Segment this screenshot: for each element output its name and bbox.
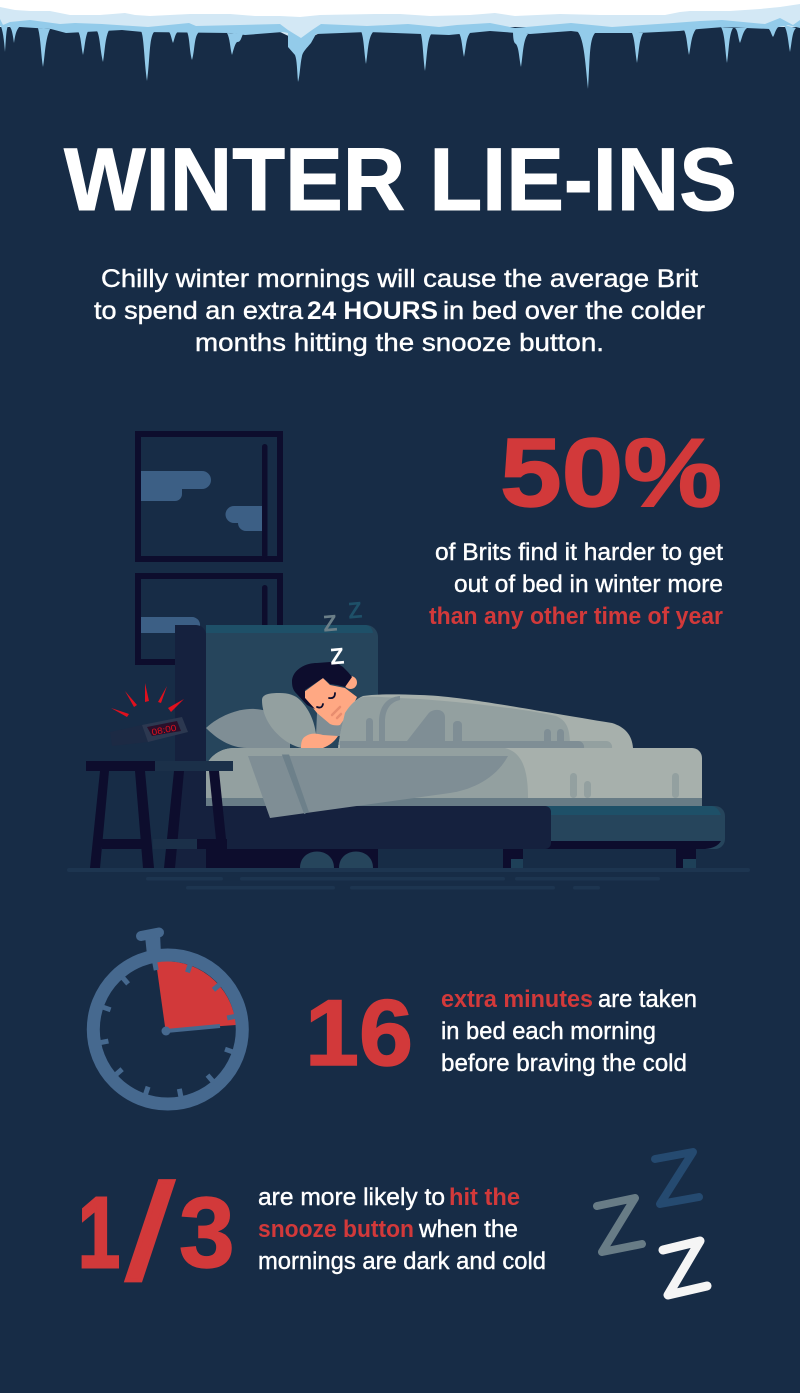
bed legs (503, 849, 696, 868)
snore Z letters (322, 596, 363, 670)
icicle drips (0, 24, 796, 89)
sleeping person (292, 662, 357, 748)
icon: window lower (138, 576, 280, 662)
stat: one third: snooze button (258, 1216, 414, 1243)
stat: 50 percent (429, 418, 723, 630)
stat: one third: mornings are dark and cold (258, 1248, 546, 1275)
icon: sleeping Z letters (597, 1152, 707, 1295)
icon: alarm clock (110, 683, 188, 746)
bed base (206, 806, 725, 849)
snore Z letters: Z (322, 609, 338, 637)
mattress and duvet (206, 748, 702, 806)
stat: 16 minutes: 16 (305, 980, 413, 1085)
intro text: 24 HOURS (307, 297, 438, 325)
intro text: Chilly winter mornings will cause the average Brit (101, 265, 698, 293)
stat: 16 minutes: in bed each morning (441, 1018, 656, 1045)
stat: one third: 3 (179, 1177, 235, 1289)
snore Z letters: Z (347, 596, 363, 624)
stat: 16 minutes: are taken (598, 986, 697, 1013)
stat: 50 percent: out of bed in winter more (454, 571, 723, 598)
stat: one third: 1 (78, 1177, 120, 1289)
title: WINTER LIE-INS (64, 129, 737, 229)
floor lines (67, 868, 750, 890)
stat: 50 percent: than any other time of year (429, 603, 723, 630)
snore Z letters: Z (329, 642, 345, 670)
top blanket over body (338, 694, 633, 748)
stat: one third: are more likely to (258, 1184, 445, 1211)
stat: 16 minutes: extra minutes (441, 986, 593, 1013)
stat: 16 minutes (305, 980, 697, 1085)
intro text: to spend an extra (94, 297, 303, 325)
stat: one third: hit the (449, 1184, 520, 1211)
stat: one third: when the (418, 1216, 518, 1243)
intro text (94, 265, 705, 357)
intro text: in bed over the colder (443, 297, 705, 325)
stat: 50 percent: of Brits find it harder to get (435, 539, 723, 566)
pillows (206, 693, 317, 748)
icon: stopwatch (93, 932, 242, 1104)
stat: one third (78, 1157, 546, 1308)
duvet fold (248, 756, 508, 818)
stat: 50 percent: 50% (500, 418, 722, 527)
bedside table (86, 761, 233, 868)
slippers (300, 852, 373, 868)
stat: one third: / (127, 1157, 174, 1308)
bed illustration (175, 596, 725, 868)
intro text: months hitting the snooze button. (195, 329, 604, 357)
headboard (175, 625, 378, 868)
icicles border (0, 0, 800, 89)
icon: alarm clock: 08:00 (151, 723, 177, 737)
stat: 16 minutes: before braving the cold (441, 1050, 687, 1077)
icon: window upper (138, 434, 280, 559)
